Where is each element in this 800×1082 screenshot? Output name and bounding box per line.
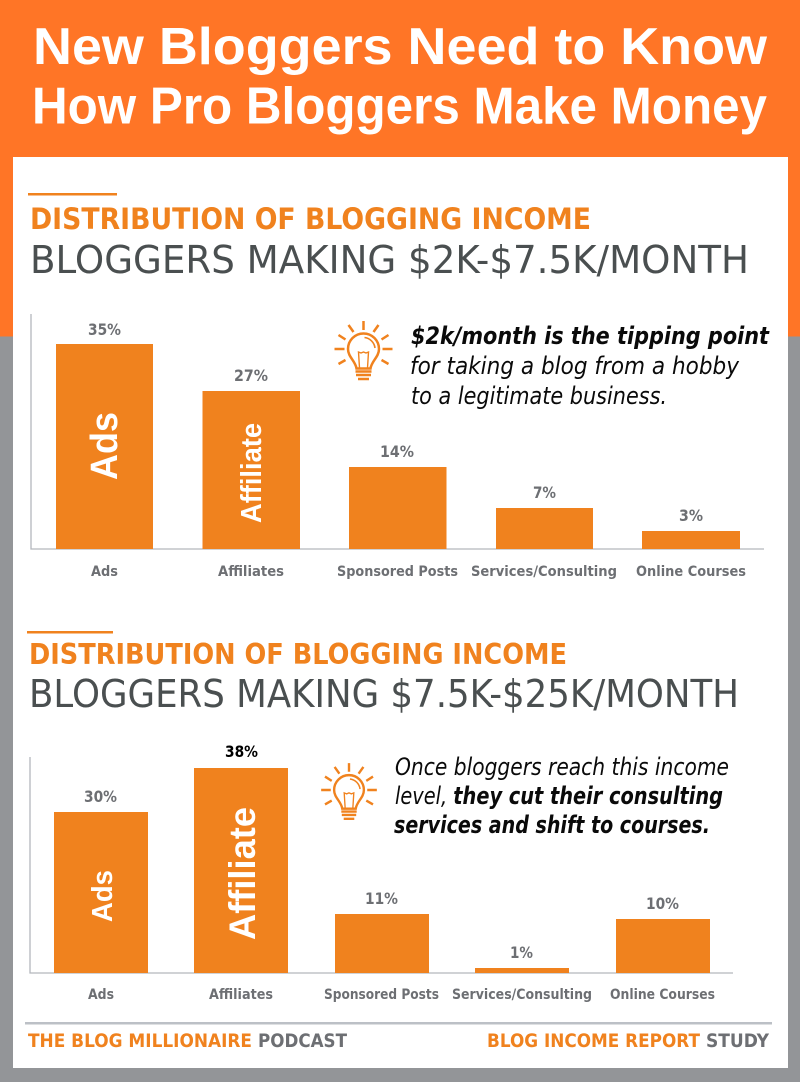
heading: chart 1 <box>28 193 749 282</box>
bar: Online Courses 3% <box>636 506 746 580</box>
heading: chart 1: DISTRIBUTION OF BLOGGING INCOME <box>30 202 591 236</box>
bar: Online Courses 10%: Online Courses <box>610 987 715 1003</box>
bar: Sponsored Posts 11%: Sponsored Posts <box>324 987 439 1003</box>
callout: consulting to courses <box>394 753 729 839</box>
bar chart: $7.5K-$25K/month <box>30 742 733 1003</box>
bar: Sponsored Posts 11% <box>324 889 439 1003</box>
bar: Affiliates 27% <box>202 366 300 580</box>
bar chart: $2K-$7.5K/month <box>31 314 764 580</box>
bar: Ads 30% <box>54 787 148 1003</box>
heading: chart 2: BLOGGERS MAKING $7.5K-$25K/MONTH <box>29 672 739 716</box>
bar: Ads 30%: 30% <box>84 787 117 806</box>
footer: PODCAST <box>258 1030 347 1052</box>
bar: Ads 30%: Ads <box>88 987 114 1003</box>
bar: Sponsored Posts 11%: 11% <box>365 889 398 908</box>
bar: Online Courses 10% <box>610 894 715 1003</box>
footer: STUDY <box>706 1030 769 1052</box>
bar: Services/Consulting 1%: Services/Consulting <box>452 987 592 1003</box>
bar: Online Courses 3%: 3% <box>679 506 703 525</box>
callout: consulting to courses: services and shift to courses. <box>394 811 710 839</box>
bar: Affiliates 38%: 38% <box>225 742 258 761</box>
bar: Ads 35%: 35% <box>88 320 121 339</box>
callout: tipping point: for taking a blog from a hobby <box>410 352 740 380</box>
bar: Ads 35%: Ads <box>91 564 118 580</box>
bar: Services/Consulting 1%: 1% <box>510 943 533 962</box>
bar: Online Courses 10%: 10% <box>646 894 679 913</box>
heading: chart 2 <box>27 631 739 716</box>
bar: Ads 35% <box>56 320 153 580</box>
bar: Services/Consulting 7%: 7% <box>533 483 556 502</box>
bar: Sponsored Posts 14% <box>337 442 458 580</box>
heading: chart 2: DISTRIBUTION OF BLOGGING INCOME <box>29 638 567 671</box>
bar: Affiliates 38% <box>194 742 288 1003</box>
title: New Bloggers Need to Know <box>33 18 768 76</box>
bar: Online Courses 3%: Online Courses <box>636 564 746 580</box>
footer: BLOG INCOME REPORT <box>487 1030 700 1052</box>
icon: light bulb <box>321 763 377 819</box>
bar: Ads 30%: Ads <box>87 870 119 922</box>
bar: Affiliates 27%: 27% <box>234 366 268 385</box>
bar: Services/Consulting 1% <box>452 943 592 1003</box>
callout: tipping point: to a legitimate business. <box>411 382 667 410</box>
callout: consulting to courses: Once bloggers reach this income <box>395 753 729 781</box>
bar: Affiliates 38%: Affiliates <box>209 987 273 1003</box>
bar: Sponsored Posts 14%: 14% <box>380 442 414 461</box>
title: How Pro Bloggers Make Money <box>32 78 767 136</box>
callout: tipping point <box>410 322 770 410</box>
bar: Affiliates 27%: Affiliates <box>218 564 284 580</box>
bar: Sponsored Posts 14%: Sponsored Posts <box>337 564 458 580</box>
bar: Services/Consulting 7%: Services/Consulting <box>471 564 617 580</box>
bar: Services/Consulting 7% <box>471 483 617 580</box>
bar: Affiliates 38%: Affiliate <box>222 807 263 940</box>
icon: light bulb <box>334 321 392 379</box>
bar: Affiliates 27%: Affiliate <box>236 423 268 523</box>
footer: THE BLOG MILLIONAIRE <box>28 1030 252 1052</box>
callout: consulting to courses: level, they cut their consulting <box>395 782 723 810</box>
bar: Ads 35%: Ads <box>84 412 126 480</box>
title <box>32 18 768 136</box>
footer <box>25 1022 772 1052</box>
heading: chart 1: BLOGGERS MAKING $2K-$7.5K/MONTH <box>30 238 749 282</box>
